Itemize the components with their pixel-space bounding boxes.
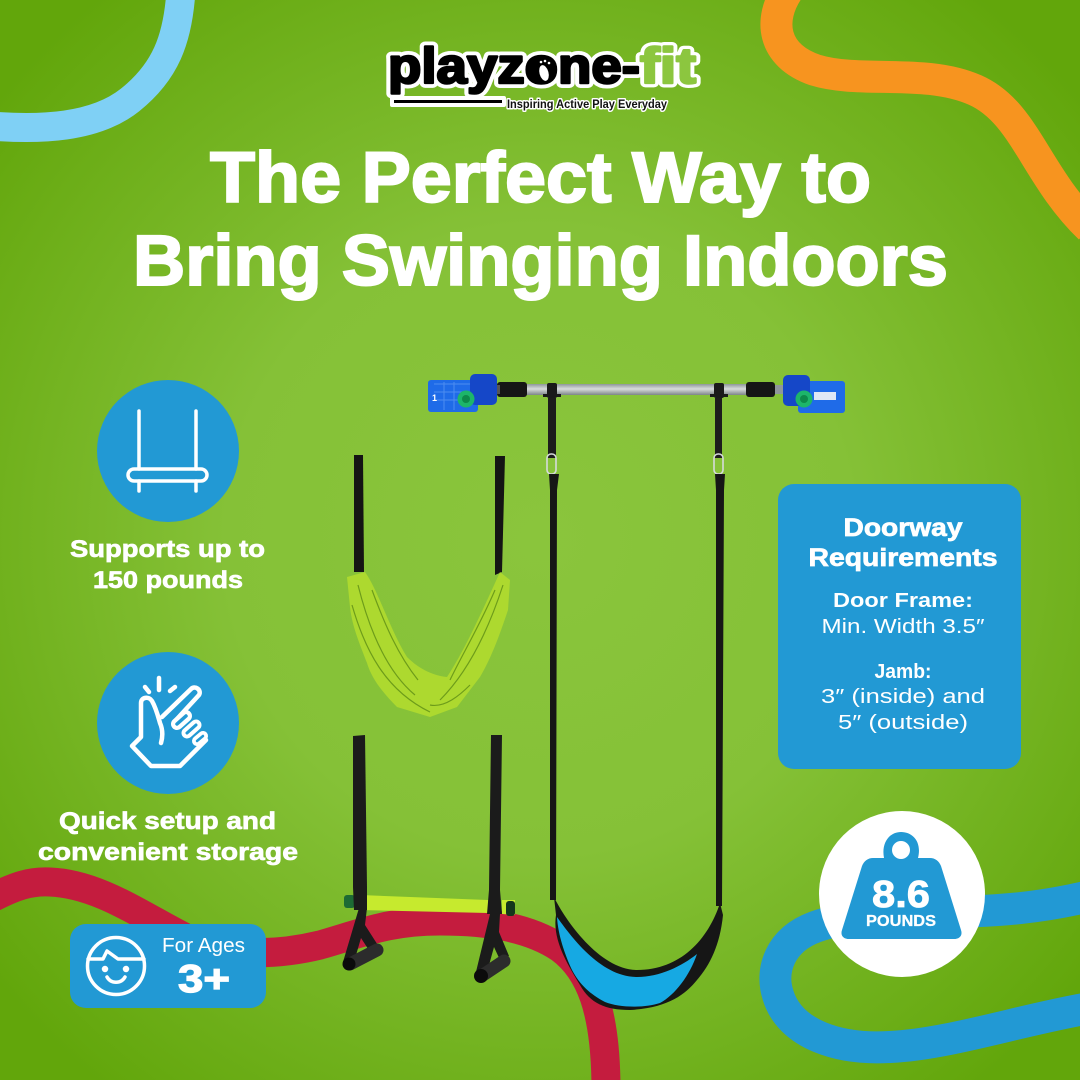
feature: quick setup — [38, 652, 298, 866]
jamb spec: Jamb: — [874, 661, 932, 683]
gray bar — [525, 384, 747, 395]
decorative wave: blue — [775, 896, 1080, 1047]
weight text — [866, 874, 936, 930]
left handle — [342, 908, 381, 970]
product: swing with seat — [547, 398, 725, 1010]
title: Bring Swinging Indoors — [133, 222, 948, 301]
long straps — [549, 474, 725, 906]
icon: child face — [88, 938, 144, 994]
decorative wave: red — [0, 882, 606, 1080]
hammock fabric — [347, 572, 510, 717]
carabiners — [547, 454, 723, 474]
right blue anchor — [783, 375, 845, 413]
door frame spec: Door Frame: — [833, 590, 973, 612]
door frame spec: Min. Width 3.5″ — [822, 616, 984, 638]
decorative wave: orange — [776, 0, 1080, 228]
icon: kettle weight — [841, 832, 962, 939]
age text — [162, 935, 245, 1001]
icon: swing — [97, 380, 239, 522]
logo wordmark: fit — [640, 38, 696, 94]
label: quick setup: Quick setup and — [59, 808, 276, 835]
logo wordmark: fit — [640, 38, 696, 94]
trainer straps — [353, 735, 502, 914]
age badge — [70, 924, 266, 1008]
seat — [554, 897, 723, 1010]
product: hammock — [347, 455, 510, 717]
logo — [388, 38, 696, 111]
logo wordmark: playzone- — [388, 38, 640, 94]
decorative wave: light blue — [0, 0, 181, 128]
trainer bar caps — [344, 895, 515, 916]
label: supports: 150 pounds — [93, 567, 243, 594]
hammock straps — [354, 455, 505, 575]
weight text: 8.6 — [872, 874, 930, 916]
curled fingers — [177, 716, 203, 741]
feature: supports up to 150 pounds — [70, 380, 265, 594]
doorway requirements panel — [778, 484, 1021, 769]
title — [133, 139, 948, 301]
left blue anchor: 1 — [432, 393, 437, 403]
upper straps — [548, 398, 722, 458]
jamb spec: 3″ (inside) and — [821, 686, 985, 708]
left blue anchor — [428, 374, 497, 412]
icon: finger snap — [97, 652, 239, 794]
panel heading — [808, 514, 998, 572]
product: door bar with anchors — [428, 374, 845, 413]
right handle — [474, 914, 509, 983]
strap loops on bar — [543, 383, 728, 398]
logo wordmark: playzone- — [388, 38, 640, 94]
jamb spec — [821, 661, 985, 734]
door frame spec — [822, 590, 984, 638]
label: quick setup — [38, 808, 298, 866]
trainer lime bar — [360, 895, 488, 913]
age text: For Ages — [162, 935, 245, 957]
label: supports — [70, 536, 265, 594]
logo footprint — [530, 57, 556, 83]
couplers — [494, 382, 784, 397]
label: quick setup: convenient storage — [38, 839, 298, 866]
weight text: POUNDS — [866, 913, 936, 930]
label: supports: Supports up to — [70, 536, 265, 563]
product: trainer bar — [342, 735, 515, 983]
panel heading: Doorway — [844, 514, 963, 542]
jamb spec: 5″ (outside) — [838, 712, 968, 734]
logo tagline: Inspiring Active Play Everyday — [507, 97, 667, 111]
weight badge — [819, 811, 985, 977]
title: The Perfect Way to — [210, 139, 871, 218]
logo wordmark — [388, 38, 696, 105]
age text: 3+ — [178, 958, 230, 1001]
panel heading: Requirements — [808, 544, 998, 572]
